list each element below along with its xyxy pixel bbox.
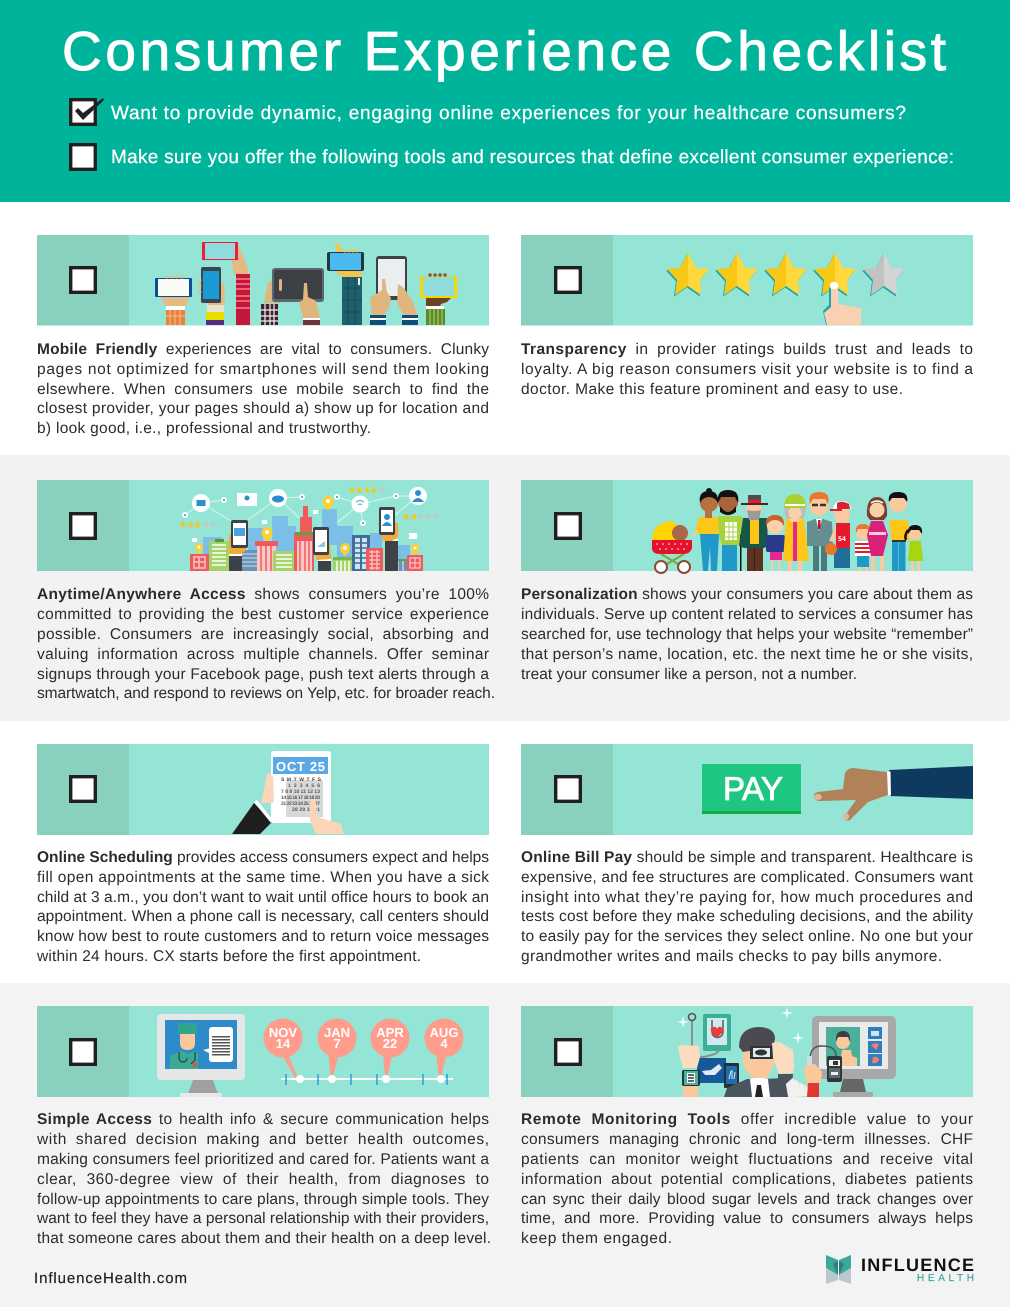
body text: can sync their daily blood sugar levels and track changes over — [521, 1191, 973, 1208]
body text: follow-up appointments to care plans, through simple tools. They — [37, 1191, 489, 1208]
checkbox — [556, 514, 580, 538]
body text: time, and more. Providing value to consumers always helps — [521, 1210, 973, 1227]
body text: want to feel they have a personal relationship with their providers, — [36, 1210, 489, 1227]
body text: consumers managing chronic and long-term illnesses. CHF — [521, 1131, 973, 1148]
body text — [37, 341, 489, 437]
banner — [37, 744, 489, 835]
wordmark: INFLUENCE — [861, 1255, 974, 1275]
body text: Simple Access to health info & secure communication helps — [37, 1111, 489, 1128]
panel: personalization — [521, 480, 973, 683]
logo — [826, 1255, 974, 1284]
timeline with date pins: APR — [376, 1025, 404, 1040]
illustration: calendar tablet: 1 2 3 4 5 6 — [288, 783, 320, 789]
checkbox — [71, 514, 95, 538]
footer url: InfluenceHealth.com — [34, 1270, 187, 1287]
body text — [521, 586, 973, 683]
illustration: calendar tablet: 7 8 9 10 11 12 13 — [281, 789, 320, 795]
body text — [36, 1111, 491, 1247]
illustration: family group — [652, 488, 923, 573]
illustration: calendar tablet: 28 29 30 31 — [292, 807, 320, 813]
timeline with date pins: 7 — [333, 1036, 341, 1051]
body text: loyalty. A big reason consumers visit your website is to find a — [521, 361, 973, 378]
body text: to easily pay for the services they select online. No one but your — [521, 928, 973, 945]
banner — [521, 235, 973, 326]
checkbox — [71, 777, 95, 801]
icon: empty checkbox — [71, 145, 95, 169]
body text: valuing information across multiple channels. Offer seminar — [37, 646, 489, 663]
banner — [521, 744, 973, 835]
timeline with date pins — [264, 1018, 464, 1085]
illustration: star rating with finger — [666, 253, 905, 325]
body text: Anytime/Anywhere Access shows consumers you’re 100% — [37, 586, 489, 603]
body text: possible. Consumers are increasingly social, absorbing and — [37, 626, 489, 643]
body text: appointment. When a phone call is necessary, call centers should — [37, 908, 489, 925]
body text: clear, 360-degree view of their health, from diagnoses to — [37, 1171, 489, 1188]
illustration: calendar tablet: S M T W T F S — [281, 777, 322, 783]
body text: treat your consumer like a person, not a number. — [521, 666, 857, 683]
body text — [521, 849, 974, 965]
body text: doctor. Make this feature prominent and easy to use. — [521, 381, 903, 398]
body text — [37, 586, 495, 702]
body text: keep them engaged. — [521, 1230, 672, 1247]
checkbox — [556, 268, 580, 292]
illustration: calendar tablet — [232, 751, 344, 834]
body text: individuals. Serve up content related to services a consumer has — [521, 606, 973, 623]
body text: insight into what they’re paying for, how much procedures and — [521, 889, 973, 906]
body text: Personalization shows your consumers you care about them as — [521, 586, 973, 603]
body text: Mobile Friendly experiences are vital to consumers. Clunky — [37, 341, 489, 358]
banner — [37, 235, 489, 326]
timeline with date pins: 4 — [440, 1036, 448, 1051]
body text — [521, 341, 973, 398]
body text: smartwatch, and respond to reviews on Yelp, etc. for broader reach. — [37, 685, 495, 702]
icon: logo mark — [826, 1255, 851, 1284]
body text: that person’s name, location, etc. the next time he or she visits, — [521, 646, 973, 663]
illustration: family group: 54 — [838, 536, 846, 543]
icon: checked checkbox — [71, 98, 104, 124]
illustration: calendar tablet: 14 15 16 17 18 19 20 — [281, 795, 320, 801]
body text: Online Scheduling provides access consumers expect and helps — [37, 849, 489, 866]
body text: Remote Monitoring Tools offer incredible value to your — [521, 1111, 973, 1128]
subbrand: HEALTH — [917, 1273, 974, 1284]
illustration: hands holding devices — [155, 242, 457, 325]
body text: child at 3 a.m., you don’t want to wait until office hours to book an — [37, 889, 489, 906]
illustration: remote monitoring — [677, 1007, 896, 1098]
banner — [37, 480, 489, 571]
banner — [37, 1006, 489, 1097]
body text — [36, 849, 489, 965]
timeline with date pins: 22 — [383, 1036, 397, 1051]
intro line 2: Make sure you offer the following tools and resources that define excellent consumer experience: — [111, 147, 954, 168]
body text: closest provider, your pages should a) show up for location and — [37, 400, 489, 417]
illustration: pay button and hand — [702, 764, 973, 821]
body text: that someone cares about them and their health on a deep level. — [37, 1230, 491, 1247]
pay label: PAY — [723, 770, 783, 807]
body text: information about potential complications, diabetes patients — [521, 1171, 973, 1188]
illustration: telehealth monitor — [157, 1014, 245, 1097]
body text: searched for, use technology that helps your website “remember” — [521, 626, 973, 643]
body text: signups through your Facebook page, push text alerts through a — [37, 666, 489, 683]
banner — [521, 1006, 973, 1097]
body text: making consumers feel prioritized and cared for. Patients want a — [37, 1151, 489, 1168]
illustration: connected city — [180, 486, 440, 571]
checkbox — [556, 1040, 580, 1064]
body text: pages not optimized for smartphones will send them looking — [37, 361, 489, 378]
body text: fill open appointments at the same time. When you have a sick — [37, 869, 489, 886]
calendar date: OCT 25 — [276, 759, 325, 774]
body text: patients can monitor weight fluctuations and receive vital — [521, 1151, 973, 1168]
timeline with date pins: JAN — [324, 1025, 350, 1040]
body text: within 24 hours. CX starts before the first appointment. — [36, 948, 421, 965]
body text — [521, 1111, 973, 1247]
checkbox — [71, 268, 95, 292]
body text: tests cost before they make scheduling decisions, and the ability — [521, 908, 973, 925]
checkbox — [556, 777, 580, 801]
panel: simple access — [36, 1006, 491, 1247]
illustration: calendar tablet: 21 22 23 24 25 26 27 — [281, 801, 320, 807]
panel: transparency — [521, 235, 973, 398]
checkbox — [71, 1040, 95, 1064]
panel: online bill pay — [521, 744, 974, 965]
body text: know how best to route customers and to return voice messages — [37, 928, 489, 945]
body text: with shared decision making and better health outcomes, — [36, 1131, 489, 1148]
panel: remote monitoring tools — [521, 1006, 973, 1247]
body text: expensive, and fee structures are complicated. Consumers want — [521, 869, 974, 886]
intro line 1: Want to provide dynamic, engaging online experiences for your healthcare consumers? — [111, 103, 906, 124]
title: Consumer Experience Checklist — [62, 20, 946, 82]
timeline with date pins: AUG — [430, 1025, 458, 1040]
body text: Transparency in provider ratings builds trust and leads to — [521, 341, 973, 358]
timeline with date pins: NOV — [269, 1025, 297, 1040]
header panel — [0, 0, 1010, 202]
body text: committed to providing the best customer service experience — [37, 606, 489, 623]
body text: b) look good, i.e., professional and trustworthy. — [37, 420, 371, 437]
body text: elsewhere. When consumers use mobile search to find the — [37, 381, 489, 398]
panel: mobile friendly — [37, 235, 489, 437]
body text: grandmother writes and mails checks to pay bills anymore. — [521, 948, 942, 965]
panel: online scheduling — [36, 744, 489, 965]
banner — [521, 480, 973, 571]
panel: anytime anywhere access — [37, 480, 495, 702]
body text: Online Bill Pay should be simple and transparent. Healthcare is — [521, 849, 973, 866]
timeline with date pins: 14 — [276, 1036, 291, 1051]
